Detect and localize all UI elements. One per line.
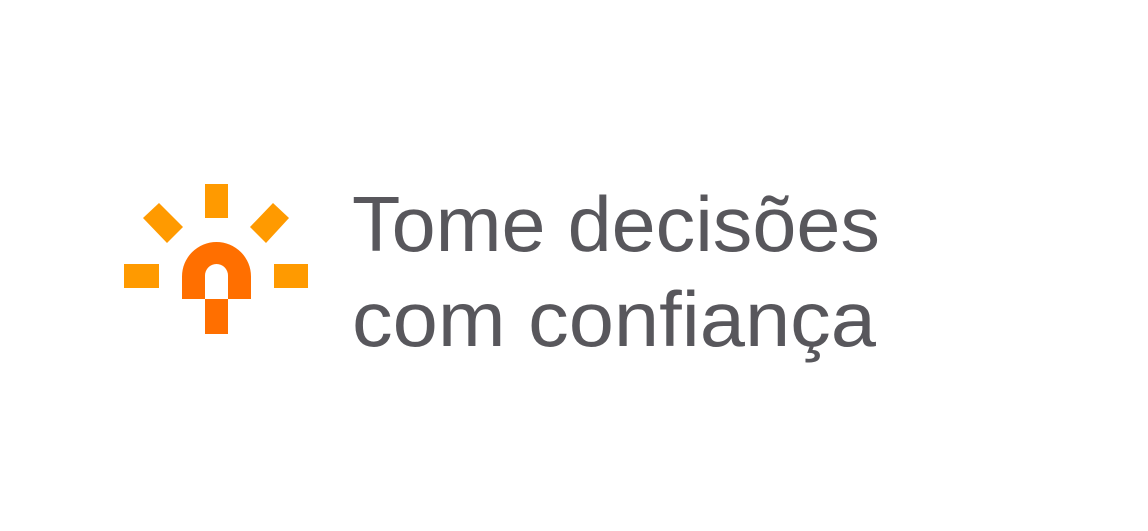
icon: bulb stem [205, 299, 228, 334]
title line 1: Tome decisões [352, 180, 880, 268]
icon: left diagonal ray [143, 203, 183, 243]
icon: left ray [124, 264, 159, 288]
title line 2: com confiança [352, 275, 877, 363]
title text [352, 180, 880, 363]
icon: bulb arch [182, 242, 251, 299]
icon: top ray [205, 184, 228, 218]
icon: right diagonal ray [250, 203, 289, 243]
icon: right ray [274, 264, 308, 288]
icon: lightbulb with rays [124, 184, 308, 334]
